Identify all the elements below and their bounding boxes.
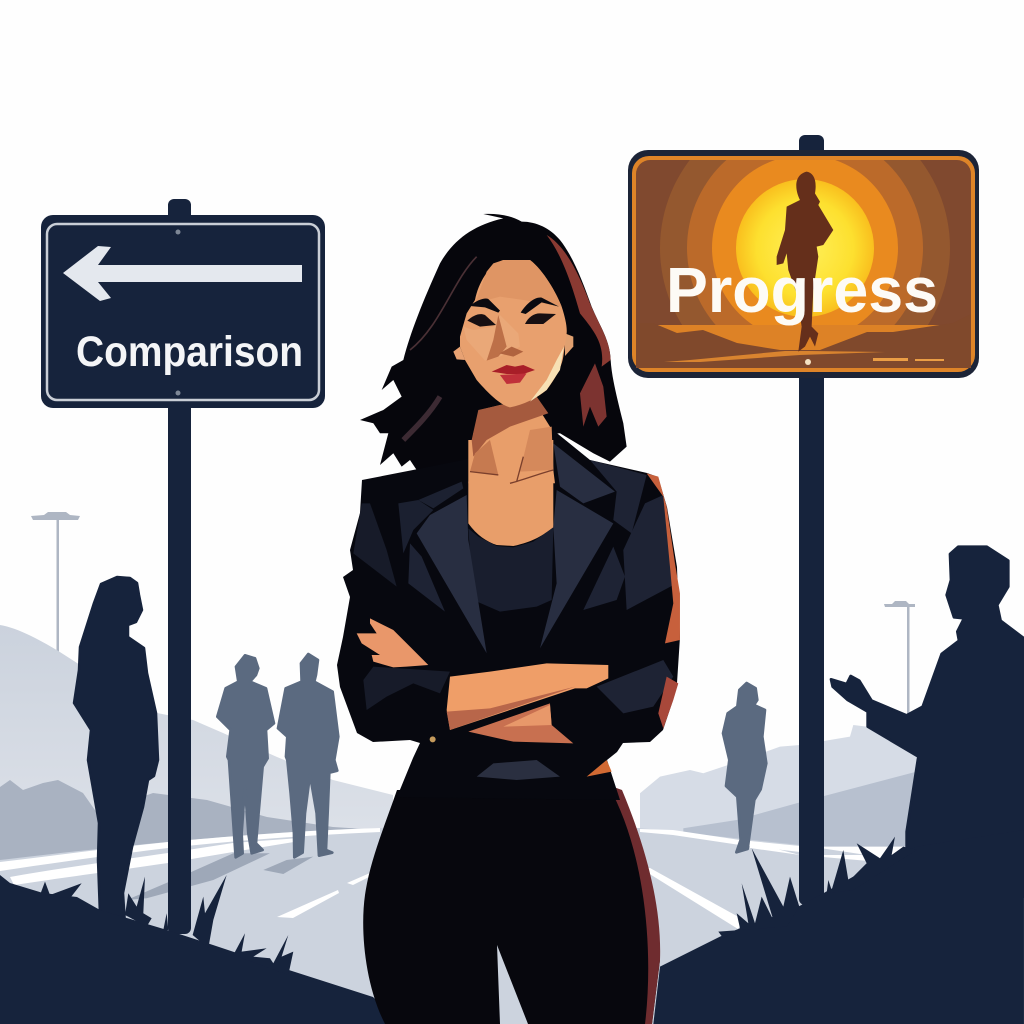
right chest panel xyxy=(583,547,625,610)
right collar xyxy=(553,443,615,503)
walker shadows xyxy=(127,853,313,900)
cheek highlight xyxy=(530,347,564,402)
left ear xyxy=(453,347,465,360)
hair xyxy=(360,214,627,470)
chest skin xyxy=(468,440,553,546)
left eye xyxy=(467,314,496,327)
neck shadow xyxy=(472,397,548,457)
background hills left xyxy=(0,625,393,870)
orange rim light xyxy=(647,473,680,643)
left sleeve highlight xyxy=(363,667,450,710)
nose shadow xyxy=(487,315,507,361)
sign landscape xyxy=(628,310,979,378)
sign label: Comparison: Comparison xyxy=(76,328,303,376)
hand xyxy=(357,618,428,667)
right lapel xyxy=(540,490,613,648)
upper lip xyxy=(492,365,535,374)
left chest panel xyxy=(408,543,445,612)
trousers xyxy=(363,790,660,1024)
road xyxy=(0,828,900,1024)
street lamp left xyxy=(31,512,80,652)
lower lip xyxy=(500,373,527,384)
jacket button xyxy=(430,736,436,742)
left eyebrow xyxy=(470,299,500,313)
forearm shadow xyxy=(447,687,575,730)
neck xyxy=(468,400,555,483)
post: left sign xyxy=(168,199,191,934)
foreground ground right xyxy=(653,830,1024,1024)
background hills right xyxy=(640,725,917,847)
silhouette: distant woman xyxy=(723,683,766,852)
right shoulder panel xyxy=(590,460,647,533)
shirt xyxy=(468,527,553,612)
grass tufts right xyxy=(718,837,917,938)
left lapel xyxy=(417,495,487,653)
grass tufts left xyxy=(40,875,293,975)
right sleeve panel xyxy=(623,495,677,610)
trouser side stripe xyxy=(608,785,660,1024)
belt highlight xyxy=(477,760,560,780)
face xyxy=(460,260,567,407)
silhouette inside sign xyxy=(777,172,833,352)
street lamp right xyxy=(884,601,915,716)
walking man xyxy=(278,654,338,857)
right eye xyxy=(525,313,556,324)
sign bolt xyxy=(805,359,811,365)
jacket xyxy=(337,430,680,800)
lower arm xyxy=(468,703,573,743)
left collar xyxy=(418,482,463,508)
nose xyxy=(499,347,523,357)
icon: left arrow xyxy=(63,246,302,301)
silhouette: couple walking xyxy=(217,654,338,857)
left sleeve panel xyxy=(353,503,397,587)
sign: Progress xyxy=(628,103,979,393)
sign bolt bottom xyxy=(176,390,180,396)
hem accent xyxy=(587,760,612,777)
left shoulder panel xyxy=(398,500,433,553)
cheek shade xyxy=(463,315,520,361)
foreground ground left xyxy=(0,875,400,1024)
silhouette: man gesturing xyxy=(831,547,1024,897)
forearm xyxy=(447,663,608,730)
post: right sign xyxy=(799,135,824,905)
main figure: woman xyxy=(337,214,680,1024)
walking woman xyxy=(217,655,274,857)
sign: Comparison xyxy=(41,215,325,408)
right ear xyxy=(565,333,573,356)
neck and face xyxy=(453,260,573,483)
rim light lower xyxy=(658,677,678,728)
silhouette: woman far left xyxy=(74,577,158,925)
right eyebrow xyxy=(521,298,559,314)
arms xyxy=(357,618,678,780)
right sleeve highlight xyxy=(597,660,673,713)
sign bolt top xyxy=(176,230,180,234)
sign label: Progress: Progress xyxy=(666,254,938,326)
collarbones xyxy=(470,457,553,483)
face shadow xyxy=(475,260,562,307)
